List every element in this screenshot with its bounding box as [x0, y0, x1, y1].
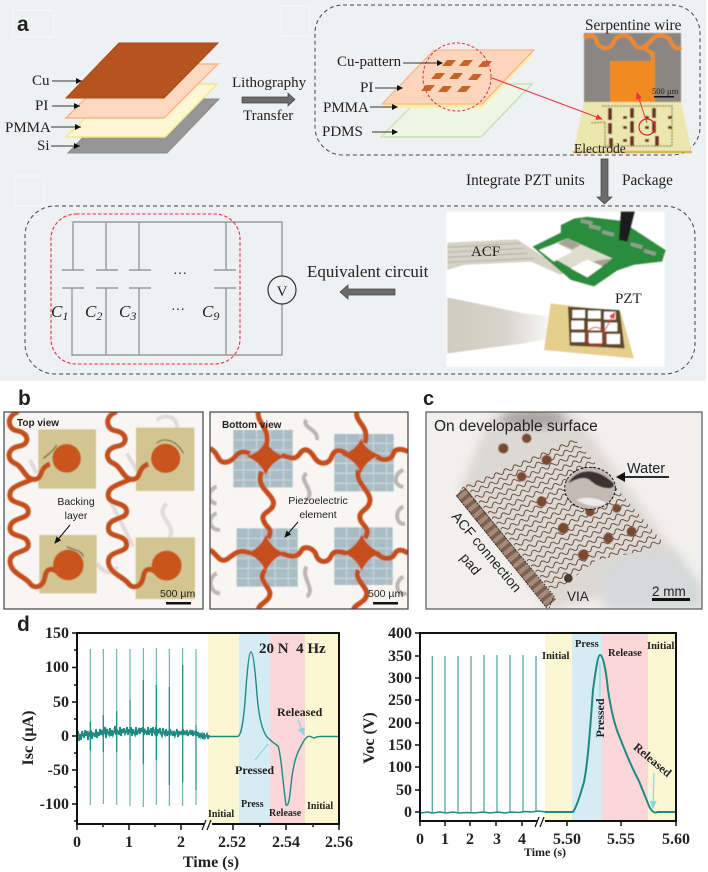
top view frame	[4, 412, 203, 609]
axis break	[202, 820, 212, 830]
top view labels: Backing	[57, 496, 95, 508]
layer labels with arrows	[5, 73, 82, 154]
panel label c: c	[423, 388, 434, 410]
y tick labels: 0	[404, 804, 412, 821]
x tick labels: 2.54	[272, 834, 300, 851]
annotations: 20 N 4 Hz	[259, 641, 326, 657]
equivalent circuit: ···	[173, 267, 187, 282]
x tick labels: 3	[493, 831, 501, 848]
equivalent circuit: 1	[62, 309, 68, 323]
y tick labels: 100	[45, 659, 69, 676]
x tick labels: 4	[518, 831, 526, 848]
noise baseline and spikes	[77, 648, 209, 807]
equivalent circuit	[51, 222, 296, 355]
surface photo labels	[434, 418, 690, 604]
photo: bottom view	[209, 412, 408, 610]
y tick labels: 100	[388, 759, 412, 776]
surface photo labels: 2 mm	[652, 584, 686, 599]
y tick labels: 250	[388, 692, 412, 709]
annotations: Released	[631, 740, 675, 780]
patterned layer labels: PI	[360, 80, 373, 96]
y tick labels: 200	[388, 715, 412, 732]
lithography transfer arrow: Transfer	[243, 108, 293, 124]
bottom view labels: Bottom view	[222, 420, 282, 431]
x tick labels: 5.60	[662, 831, 690, 848]
y tick labels: 400	[388, 625, 412, 642]
y tick labels: -50	[48, 762, 69, 779]
annotations: Pressed	[593, 698, 607, 738]
layer labels with arrows: PI	[35, 98, 48, 114]
axis titles: Voc (V)	[361, 712, 378, 764]
equivalent circuit: 3	[129, 309, 136, 323]
layer stack: Cu PI PMMA Si	[66, 43, 219, 153]
y tick labels: 150	[388, 737, 412, 754]
bottom view labels: element	[299, 509, 337, 521]
red zoom arrows	[492, 78, 655, 135]
patterned layer labels	[322, 54, 443, 140]
photo labels	[574, 17, 682, 156]
x tick labels: 5.55	[607, 831, 635, 848]
red dashed outline around capacitors	[51, 214, 240, 364]
equivalent circuit: 2	[96, 309, 102, 323]
dashed box: device and circuit	[25, 206, 695, 374]
axis titles: Time (s)	[183, 854, 239, 871]
photo: top view	[4, 412, 203, 609]
patterned layer labels: PMMA	[323, 100, 369, 116]
x tick labels: 2.52	[218, 834, 246, 851]
baseline and spikes	[420, 655, 573, 813]
y tick labels: 350	[388, 648, 412, 665]
equivalent circuit: V	[277, 284, 288, 300]
patterned layer labels: PDMS	[322, 124, 363, 140]
response curve	[208, 652, 338, 805]
photo labels: Electrode	[574, 141, 626, 156]
y tick labels: 150	[45, 625, 69, 642]
axis break	[535, 817, 545, 827]
panel label d: d	[17, 613, 30, 636]
y tick labels: -100	[40, 796, 69, 813]
y tick labels: 0	[61, 728, 69, 745]
annotations	[542, 639, 675, 808]
top view labels: 500 µm	[160, 588, 195, 600]
y tick labels: 50	[396, 782, 412, 799]
patterned layer labels: Cu-pattern	[337, 54, 402, 70]
panel label a: a	[17, 13, 29, 36]
equivalent circuit: C	[85, 302, 96, 321]
response curve	[545, 655, 676, 813]
photo: packaged device: ACF	[471, 244, 500, 260]
annotations: Initial	[647, 641, 675, 652]
annotations: Initial	[307, 801, 333, 812]
top view labels: layer	[65, 510, 88, 522]
axis titles: Isc (µA)	[20, 711, 37, 765]
axis titles: Time (s)	[524, 845, 566, 859]
lithography transfer arrow: Lithography	[232, 75, 307, 91]
x tick labels: 1	[441, 831, 449, 848]
bottom view labels	[222, 420, 403, 604]
axes	[72, 633, 339, 830]
surface photo labels: On developable surface	[434, 418, 598, 435]
layer labels with arrows: PMMA	[5, 120, 51, 136]
photo: developable surface	[426, 408, 703, 610]
patterned layer stack	[381, 43, 534, 137]
annotations: Initial	[208, 809, 234, 820]
surface photo labels: Water	[627, 461, 665, 477]
annotations: Release	[269, 808, 302, 819]
integrate step arrow and labels	[466, 159, 673, 204]
panel label b: b	[18, 387, 31, 410]
surface photo labels: VIA	[567, 589, 589, 604]
x tick labels: 2.56	[325, 834, 353, 851]
phase bands	[208, 633, 339, 824]
equivalent circuit arrow	[307, 262, 429, 299]
y tick labels	[388, 625, 412, 821]
x tick labels: 0	[73, 834, 81, 851]
bottom view frame	[210, 412, 408, 609]
x tick labels: 0	[416, 831, 424, 848]
photo: packaged device: PZT	[615, 291, 642, 307]
annotations: Pressed	[235, 763, 274, 777]
top view labels	[17, 418, 195, 604]
photo: packaged device	[446, 212, 666, 367]
annotations: Press	[241, 799, 264, 810]
bottom view labels: 500 µm	[368, 588, 403, 600]
surface photo labels: pad	[457, 550, 484, 578]
x tick labels: 2	[177, 834, 185, 851]
bottom view labels: Piezoelectric	[288, 495, 348, 507]
equivalent circuit arrow: Equivalent circuit	[307, 262, 429, 281]
chart: Voc versus time	[361, 625, 690, 859]
top view labels: Top view	[17, 418, 59, 429]
y tick labels: 50	[53, 694, 69, 711]
annotations	[208, 641, 333, 820]
axis titles	[361, 712, 566, 859]
y tick labels: 300	[388, 670, 412, 687]
equivalent circuit: C	[202, 302, 213, 321]
x tick labels	[416, 831, 690, 848]
annotations: Released	[277, 705, 323, 719]
phase bands	[545, 633, 676, 821]
integrate step arrow and labels: Integrate PZT units	[466, 172, 585, 189]
y tick labels	[40, 625, 69, 813]
x tick labels	[73, 834, 353, 851]
dashed box: patterned layers	[315, 5, 700, 155]
x tick labels: 5.50	[553, 831, 581, 848]
equivalent circuit: ···	[171, 303, 185, 318]
equivalent circuit: C	[51, 302, 62, 321]
chart: Isc versus time	[20, 625, 353, 871]
photo labels: Serpentine wire	[585, 17, 682, 34]
axis titles	[20, 711, 239, 871]
layer labels with arrows: Cu	[32, 73, 50, 89]
surface photo labels: ACF connection	[449, 508, 525, 595]
x tick labels: 1	[125, 834, 133, 851]
layer labels with arrows: Si	[37, 138, 50, 154]
annotations: Initial	[542, 651, 570, 662]
equivalent circuit: C	[119, 302, 130, 321]
photo labels: 500 µm	[652, 86, 679, 96]
surface photo frame	[426, 412, 702, 609]
panel a background	[0, 0, 706, 381]
lithography transfer arrow	[232, 75, 307, 124]
annotations: Release	[608, 648, 642, 659]
equivalent circuit: 9	[213, 309, 219, 323]
annotations: Press	[575, 639, 599, 650]
photo: serpentine wire	[573, 33, 692, 153]
axes	[415, 633, 676, 826]
x tick labels: 2	[466, 831, 474, 848]
integrate step arrow and labels: Package	[622, 172, 673, 189]
